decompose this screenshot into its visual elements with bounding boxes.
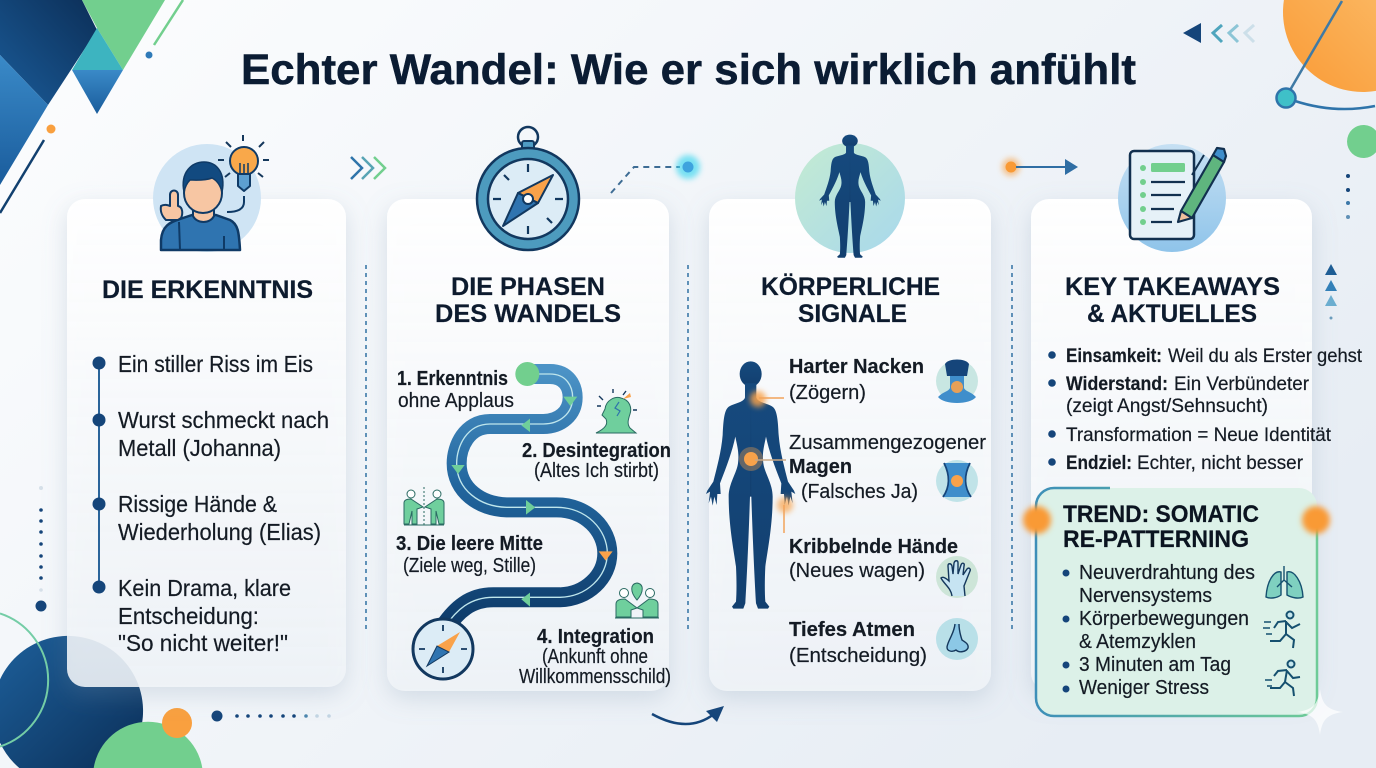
decoration: top-left triangles [0, 0, 183, 213]
decoration: arrow with orange dot [1002, 158, 1078, 176]
heading: SIGNALE [798, 300, 907, 328]
text: takeaway 2 [1066, 373, 1309, 417]
decoration: right triangles stack [1325, 264, 1337, 320]
text: takeaway 2: Widerstand: [1066, 373, 1168, 395]
body figure with signal points [706, 361, 795, 609]
heading: DES WANDELS [435, 300, 621, 328]
heading: TREND: SOMATIC [1063, 501, 1259, 528]
winding road [445, 362, 613, 627]
heading: DIE PHASEN [451, 273, 605, 301]
text: takeaway 4: Echter, nicht besser [1137, 452, 1303, 474]
text: item 4: "So nicht weiter!" [118, 630, 288, 656]
decoration: bottom curved arrow [652, 706, 724, 724]
divider lines [366, 265, 1012, 632]
heading: KÖRPERLICHE [761, 272, 940, 301]
text: signal 2: Magen [789, 455, 852, 478]
text: phase 3 [396, 533, 543, 577]
icon: broken head [596, 389, 637, 433]
icon: person with light bulb [153, 135, 269, 252]
text: phase 1 [397, 368, 514, 412]
text: signal 1 [789, 355, 924, 404]
card background [67, 199, 346, 687]
icon: stomach [936, 460, 978, 502]
text: phase 4 [519, 626, 671, 688]
decoration: chevrons between cards [351, 157, 385, 179]
text: trend items: Neuverdrahtung des [1079, 562, 1255, 584]
text: item 2: Wurst schmeckt nach [118, 407, 329, 433]
icon: nose [936, 618, 978, 660]
text: trend items: Körperbewegungen [1079, 608, 1249, 630]
text: item 2: Metall (Johanna) [118, 435, 281, 461]
icon: hand [936, 556, 978, 598]
text: phase 4: (Ankunft ohne [542, 646, 648, 668]
panel: Die Phasen des Wandels [387, 127, 671, 691]
text: signal 2: Zusammengezogener [789, 431, 986, 454]
bullets [1062, 570, 1070, 692]
text: takeaway 2: Ein Verbündeter [1174, 373, 1309, 395]
text: signal 4: Tiefes Atmen [789, 618, 915, 641]
icon: runner 1 [1263, 612, 1300, 648]
text: takeaway 1: Einsamkeit: [1066, 345, 1162, 367]
heading: DIE ERKENNTNIS [102, 276, 313, 304]
panel: Key Takeaways und Aktuelles [1023, 144, 1363, 716]
decoration: top-right orbit [1276, 0, 1376, 219]
text: signal 2 [789, 431, 986, 503]
text: phase 3: 3. Die leere Mitte [396, 533, 543, 555]
icon: neck [936, 360, 978, 403]
takeaway bullets [1048, 351, 1056, 466]
icon: lungs [1266, 566, 1303, 598]
text: item 1: Ein stiller Riss im Eis [118, 351, 313, 377]
decoration: dashed connector with glowing dot [611, 155, 700, 193]
text: item 3: Rissige Hände & [118, 491, 277, 517]
text: item 4: Entscheidung: [118, 603, 259, 629]
text: item 3 [118, 491, 321, 545]
text: phase 1: 1. Erkenntnis [397, 368, 508, 390]
text: item 4: Kein Drama, klare [118, 575, 291, 601]
text: trend items: Weniger Stress [1079, 677, 1209, 699]
card background [1031, 199, 1312, 691]
text: signal 3 [789, 535, 958, 582]
heading: & AKTUELLES [1087, 300, 1257, 328]
text: signal 1: (Zögern) [789, 381, 866, 404]
heading [1065, 273, 1280, 328]
text: trend items: & Atemzyklen [1079, 631, 1196, 653]
text: phase 1: ohne Applaus [398, 390, 514, 412]
text: phase 2: (Altes Ich stirbt) [534, 460, 659, 482]
text: item 2 [118, 407, 329, 461]
text: takeaway 2: (zeigt Angst/Sehnsucht) [1066, 395, 1268, 417]
glow dots [1023, 506, 1330, 534]
text: takeaway 3: Transformation = Neue Identität [1066, 424, 1332, 446]
decoration: sparkle [1297, 689, 1343, 735]
card background [709, 199, 991, 691]
heading [435, 273, 621, 328]
timeline [92, 356, 106, 594]
icon: compass [477, 127, 579, 250]
heading: KEY TAKEAWAYS [1065, 273, 1280, 301]
icon: two people apart [404, 487, 444, 525]
icon: end compass [413, 619, 473, 679]
icon: body in circle [795, 135, 905, 258]
text: item 4 [118, 575, 291, 656]
card background [387, 199, 669, 691]
text: trend items: Nervensystems [1079, 585, 1212, 607]
decoration: bottom dotted row [212, 710, 331, 722]
icon: runner 2 [1265, 660, 1300, 696]
icon: two people meeting at a pin [615, 583, 659, 618]
text: takeaway 1: Weil du als Erster gehst [1168, 345, 1363, 367]
text: signal 3: Kribbelnde Hände [789, 535, 958, 558]
icon: checklist with pen [1118, 144, 1226, 252]
heading [761, 272, 940, 328]
text: phase 4: 4. Integration [537, 626, 654, 648]
text: signal 4: (Entscheidung) [789, 644, 927, 667]
text: item 3: Wiederholung (Elias) [118, 519, 321, 545]
text: trend items [1079, 562, 1255, 699]
decoration: left dotted column [36, 486, 46, 612]
decoration: back-pointing arrow and chevrons [1183, 23, 1254, 43]
panel: Die Erkenntnis [67, 135, 346, 687]
heading: RE-PATTERNING [1063, 526, 1249, 553]
heading [1063, 501, 1259, 553]
text: phase 3: (Ziele weg, Stille) [403, 555, 536, 577]
text: signal 2: (Falsches Ja) [801, 480, 918, 503]
text: signal 4 [789, 618, 927, 667]
text: trend items: 3 Minuten am Tag [1079, 654, 1231, 676]
text: phase 4: Willkommensschild) [519, 666, 671, 688]
title: Echter Wandel: Wie er sich wirklich anfühlt [241, 46, 1136, 94]
text: phase 2: 2. Desintegration [522, 440, 671, 462]
text: takeaway 4: Endziel: [1066, 452, 1132, 474]
panel: Körperliche Signale [706, 135, 991, 691]
decoration: bottom-left circles [0, 614, 202, 768]
text: signal 1: Harter Nacken [789, 355, 924, 378]
text: phase 2 [522, 440, 671, 482]
callout: Trend Somatic Re-Patterning [1023, 488, 1330, 716]
text: signal 3: (Neues wagen) [789, 559, 925, 582]
